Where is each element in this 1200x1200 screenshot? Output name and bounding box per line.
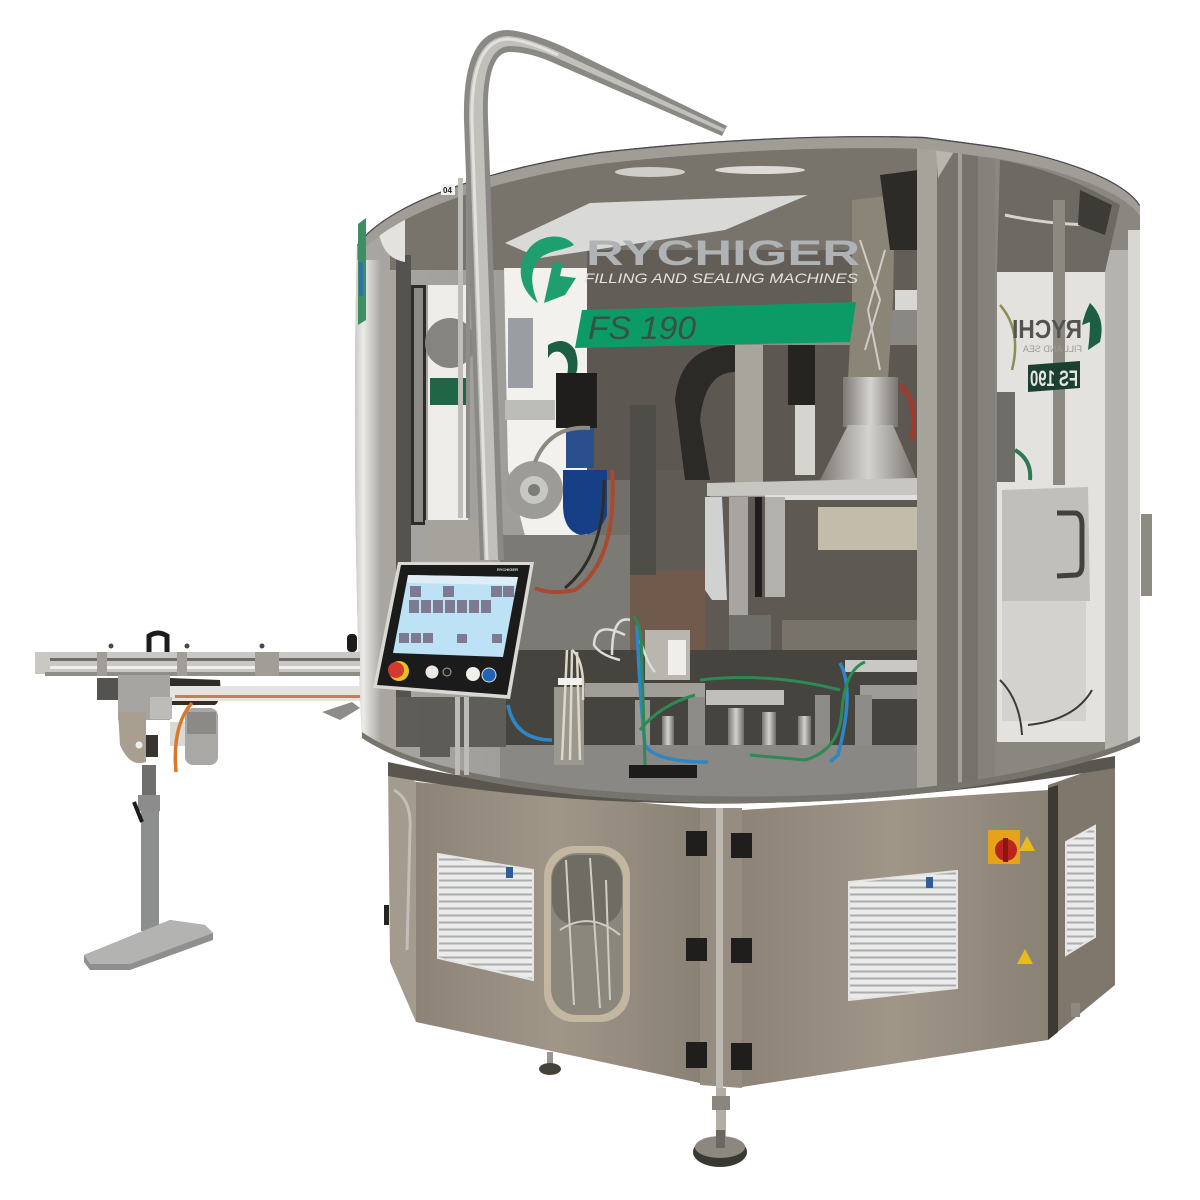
tube holder: [554, 650, 584, 765]
white background through glass: [428, 285, 468, 520]
tag 04: [441, 184, 455, 195]
right door frame: [917, 135, 937, 800]
inspection window: [544, 846, 630, 1022]
below panel posts: [420, 697, 469, 775]
vertical bar: [1053, 200, 1065, 485]
logo wordmark: RYCHIGER: [586, 234, 860, 273]
left vent: [438, 854, 533, 980]
warning signs: [1017, 836, 1035, 964]
upper interior band: [390, 140, 920, 270]
model banner: FS 190: [588, 310, 696, 346]
tag 04: 04: [443, 186, 452, 195]
base right slant panel: [1048, 762, 1115, 1040]
right vent: [849, 871, 957, 1000]
glass enclosure: [350, 130, 1152, 810]
blue gearmotor: [505, 373, 613, 592]
base left door: [416, 782, 700, 1083]
left light strip: [355, 260, 382, 760]
mirrored logo reflection: RYCHI: [1012, 314, 1082, 344]
lower left dark machinery under panel: [396, 697, 506, 747]
main switch: [988, 830, 1020, 864]
base shadow band: [388, 756, 1115, 804]
mirrored logo reflection: FILL AND SEA: [1023, 344, 1082, 354]
logo mark: [521, 237, 576, 303]
hopper: [820, 377, 917, 480]
hose on left side: [394, 790, 410, 950]
base right door: [742, 790, 1048, 1087]
black manifold: [629, 765, 697, 778]
blue hoses: [508, 625, 847, 762]
screen brand: RYCHIGER: [497, 567, 518, 572]
top reflections: [378, 207, 405, 262]
motor: [170, 703, 218, 772]
mirrored logo reflection: FS 190: [1030, 366, 1078, 391]
steel tube frame: [464, 30, 727, 560]
conveyor bed: [35, 652, 360, 674]
conveyor handles: [149, 633, 357, 652]
infeed conveyor: [35, 633, 360, 970]
top rim: [357, 136, 1140, 258]
dark block: [97, 678, 118, 700]
reflected green logo: [548, 341, 578, 373]
upper right dark machinery: [880, 170, 918, 250]
emergency stop: [388, 661, 409, 681]
lower rail: [155, 686, 360, 701]
light reflector plate: [505, 195, 808, 258]
base centre post: [700, 808, 742, 1088]
reflected wire loop and parts: [1000, 305, 1015, 370]
carousel plate and fixtures: [500, 617, 920, 805]
flexible sleeve: [848, 195, 895, 380]
model banner: [575, 302, 856, 348]
logo tagline: FILLING AND SEALING MACHINES: [584, 270, 859, 286]
touch screen: [393, 575, 518, 657]
right bay background: [995, 140, 1145, 800]
machine base cabinet: [384, 756, 1115, 1088]
discharge chute: [322, 702, 360, 720]
middle dark interior: [587, 345, 922, 485]
filling table: [705, 478, 917, 650]
white bay behind logo: [504, 268, 587, 560]
door hinges: [686, 831, 752, 1070]
push buttons: [426, 666, 496, 682]
conveyor stand: [84, 765, 213, 970]
dark drive wheel: [170, 678, 220, 705]
base left slant panel: [388, 765, 416, 1022]
mirrored logo reflection: [1012, 303, 1102, 392]
levelling feet: [539, 1003, 1080, 1167]
conveyor arm bracket: [118, 675, 172, 763]
green hoses: [633, 617, 865, 765]
door plate with handle: [1000, 487, 1092, 735]
right side latch: [1141, 514, 1152, 596]
white pneumatic tubes: [594, 619, 655, 672]
vertical rods: [458, 178, 470, 518]
perforated panel: [630, 405, 656, 575]
bottom rim: [362, 732, 1140, 806]
logo: [521, 234, 860, 303]
valve: [788, 345, 815, 475]
control panel: [373, 562, 534, 699]
block under window: [425, 520, 426, 525]
cylinder body and contents: [350, 130, 1150, 810]
slide column: [735, 345, 763, 485]
green side strip: [358, 218, 366, 325]
cable chain: [675, 345, 735, 480]
side vent: [1066, 826, 1095, 955]
